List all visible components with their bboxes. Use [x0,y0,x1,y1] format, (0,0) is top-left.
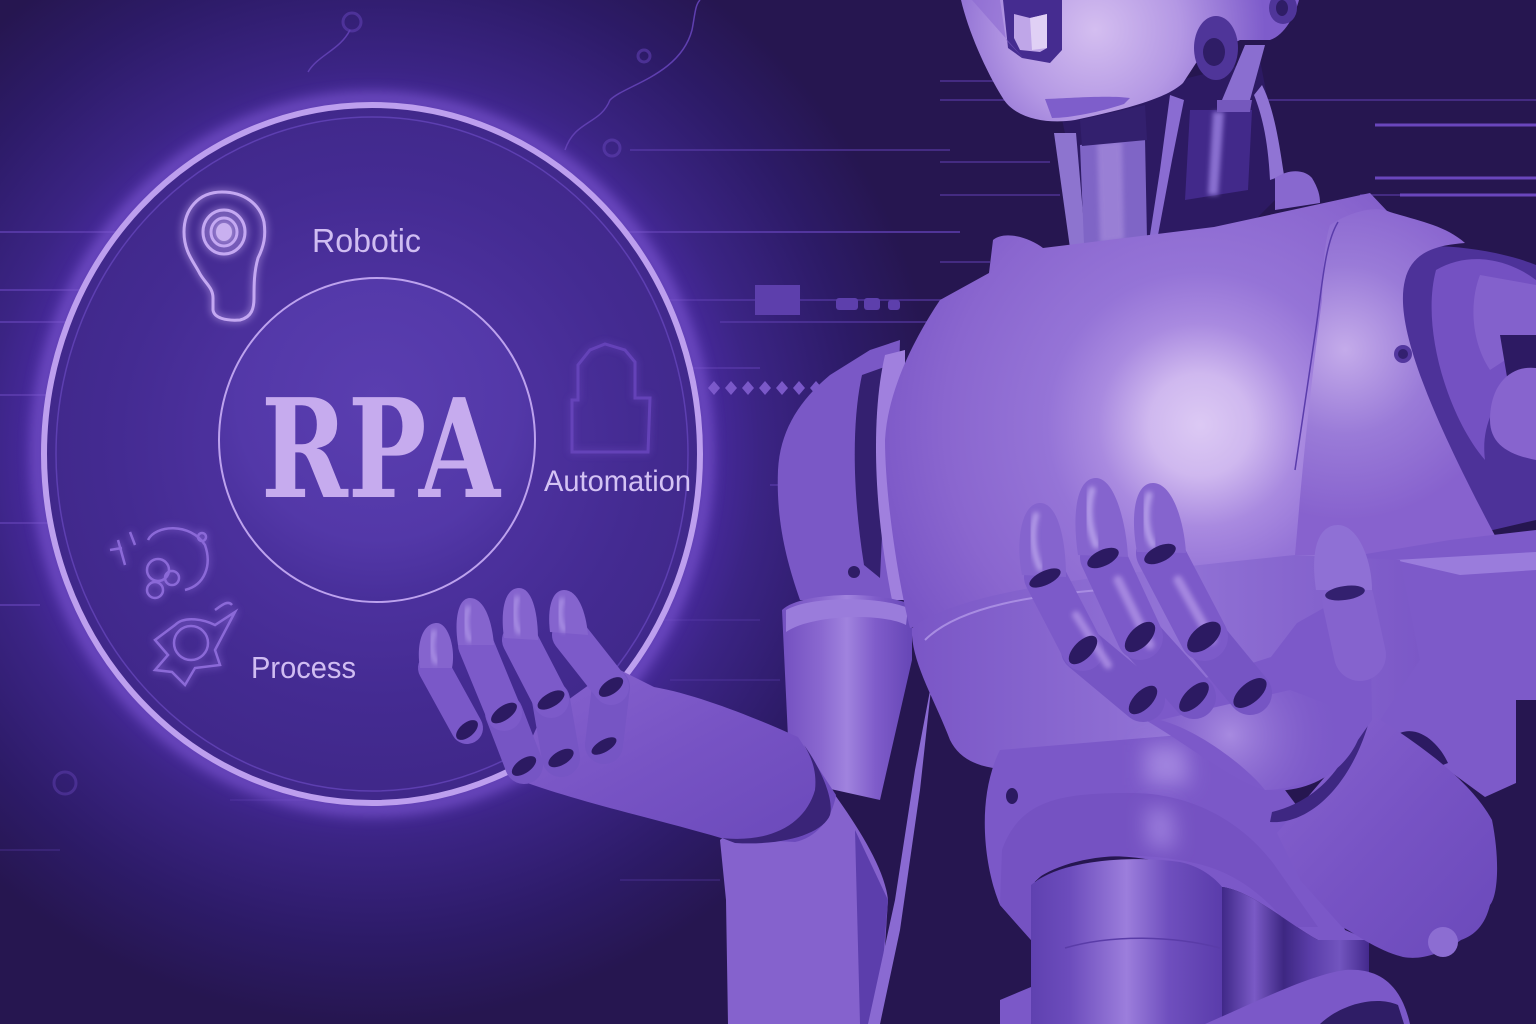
finger [549,590,626,758]
robot abdomen band [912,555,1420,790]
robot waist cylinder [1031,859,1222,1024]
robot lower arm [720,780,888,1024]
icon: building [572,344,650,452]
robot right hand fingers [1019,478,1372,719]
robot upper arm [782,595,912,800]
robot right forearm [1270,717,1497,958]
finger [503,588,577,771]
disc body [44,105,700,803]
finger [1134,483,1272,714]
robot [419,0,1536,1024]
icon: light bulb [184,192,265,320]
thumb [1314,525,1372,655]
robot right arm upper [1390,246,1536,540]
robot pelvis [1205,970,1410,1024]
robot shoulder panel [848,209,1500,578]
robot left hand fingers [419,588,626,780]
robot left forearm [514,667,836,843]
icon: gears and nodes [110,528,235,685]
robot abdomen [985,730,1369,940]
robot chest [885,193,1388,628]
robot left shoulder [778,340,900,600]
inner circle [219,278,535,602]
label: Automation: Automation [544,465,691,498]
diamond row [708,381,822,395]
panel: RPA disc [38,99,706,809]
finger [1075,478,1214,717]
finger [419,623,481,744]
label: Robotic: Robotic [312,222,421,259]
title: RPA: RPA [261,369,501,530]
robot waist rods [1222,887,1369,1024]
tech blocks [755,285,900,315]
robot right side panel [1350,530,1536,797]
robot neck [1054,45,1320,250]
robot head [961,0,1299,121]
robot right palm [1137,600,1372,791]
disc glow [38,99,706,809]
label: Process: Process [251,650,356,685]
finger [1019,503,1162,719]
finger [456,598,539,780]
